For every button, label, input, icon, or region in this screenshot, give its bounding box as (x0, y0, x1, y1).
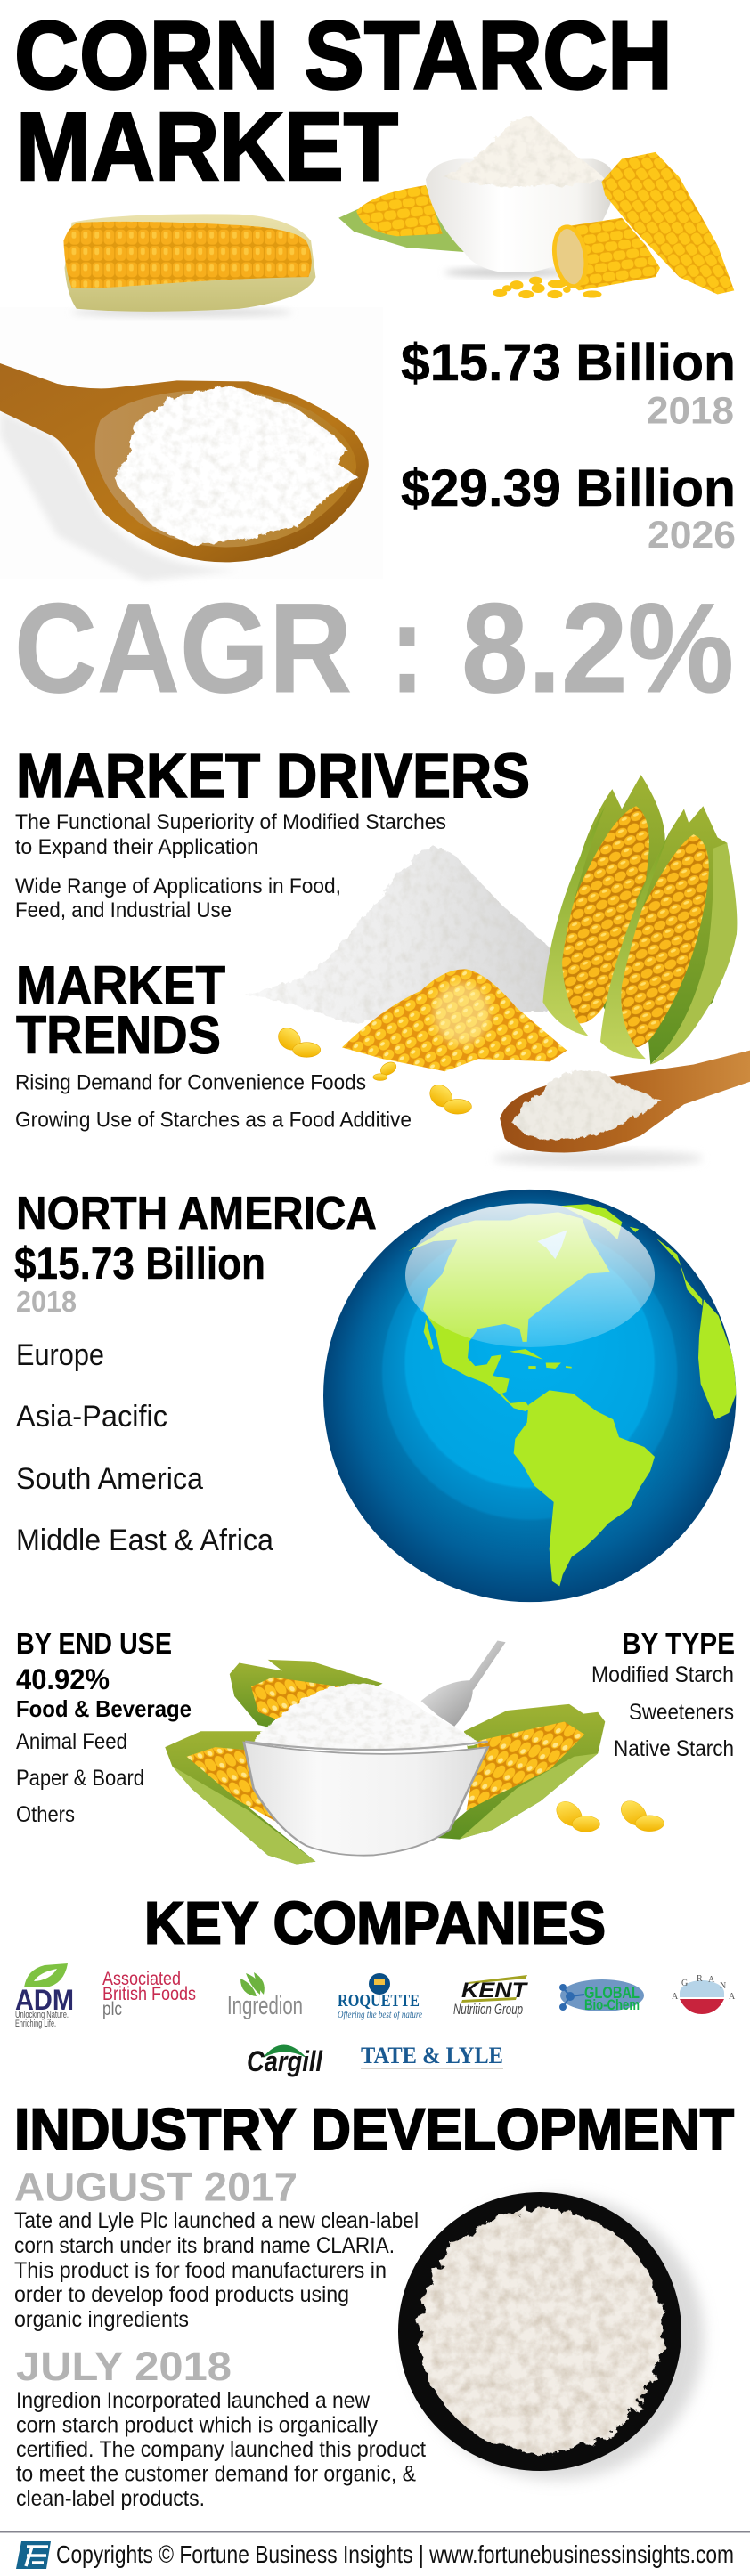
heading: key companies: KEY COMPANIES (144, 1889, 606, 1957)
icon: white starch pile (244, 847, 550, 1022)
illustration: starch pile, kernels, corn and spoon (244, 775, 750, 1166)
logo: ADM (15, 1963, 74, 2029)
logo: Global Bio-Chem: GLOBAL (584, 1984, 640, 2002)
logo: Kent: Nutrition Group (453, 2001, 523, 2018)
text: other regions list: Europe (16, 1338, 104, 1372)
logo: Roquette (338, 1973, 423, 2020)
logo: Kent: KENT (461, 1979, 529, 2003)
development: July 2018: clean-label products. (16, 2486, 205, 2511)
text: other regions list: Middle East & Africa (16, 1524, 273, 1557)
stat: 2018 market size: $15.73 Billion (401, 334, 736, 392)
icon: corn cob left (542, 775, 670, 1036)
text: market trends list: Growing Use of Starches as a Food Additive (15, 1108, 412, 1133)
logo: Agrana: G (681, 1979, 688, 1988)
logo: Roquette: ROQUETTE (338, 1991, 420, 2011)
logo: Global Bio-Chem: Bio-Chem (584, 1996, 640, 2013)
segment: by end use: BY END USE (16, 1627, 172, 1660)
icon: white bowl of starch with corn (338, 116, 734, 298)
icon: cut cob (550, 218, 660, 290)
icon: loose kernels (275, 1024, 471, 1114)
logo: Agrana (672, 1974, 736, 2014)
text: market drivers list: Wide Range of Applications in Food, (15, 874, 341, 898)
logo: ADM: ADM (15, 1984, 74, 2016)
text: market drivers list (15, 810, 446, 922)
text: other regions list (16, 1338, 273, 1557)
stat: 2026 market size (401, 459, 736, 557)
heading: North America figure: NORTH AMERICA (16, 1188, 377, 1239)
logo: Agrana: A (729, 1992, 736, 2002)
development: August 2017: organic ingredients (14, 2307, 189, 2332)
icon: whole cob (602, 152, 734, 294)
development: August 2017: corn starch under its brand name CLARIA. (14, 2233, 395, 2258)
photo background behind spoon (0, 307, 383, 579)
development: July 2018: corn starch product which is organically (16, 2413, 378, 2438)
icon: black plate of starch (398, 2192, 704, 2480)
logo: Global Bio-Chem (559, 1979, 644, 2013)
heading: market drivers: MARKET DRIVERS (16, 741, 530, 810)
development: July 2018: to meet the customer demand for organic, & (16, 2461, 416, 2486)
heading: market trends: MARKET (16, 955, 225, 1015)
text: market drivers list: The Functional Superiority of Modified Starches (15, 810, 446, 834)
text: market drivers list: to Expand their Application (15, 835, 258, 859)
logo: Associated British Foods: plc (102, 1999, 122, 2019)
icon: kernels (552, 1799, 664, 1832)
icon: wooden spoon with starch (493, 1051, 750, 1166)
icon: bowl (426, 158, 615, 272)
icon: globe (323, 1190, 737, 1602)
stat: CAGR: CAGR (14, 578, 352, 719)
heading: market trends: TRENDS (16, 1005, 221, 1065)
segment: by end use: Others (16, 1802, 75, 1827)
development: August 2017: Tate and Lyle Plc launched a new clean-label (14, 2208, 419, 2233)
icon: metal scoop (421, 1640, 506, 1727)
icon: corn upper left (230, 1660, 383, 1731)
icon: loose kernels (493, 277, 602, 298)
icon: corn behind bowl (338, 185, 464, 252)
text: market trends list: Rising Demand for Convenience Foods (15, 1070, 366, 1095)
text: market drivers list: Feed, and Industrial Use (15, 898, 232, 922)
stat: CAGR: : (390, 578, 424, 719)
heading: North America figure: $15.73 Billion (14, 1239, 265, 1288)
stat: CAGR: 8.2% (461, 578, 734, 719)
heading: North America figure (14, 1188, 377, 1318)
stat: CAGR (14, 578, 734, 719)
development: July 2018: certified. The company launched this product (16, 2437, 426, 2462)
text: market trends list (15, 1070, 412, 1133)
icon: corn right (436, 1704, 605, 1840)
title: MARKET (16, 93, 398, 201)
illustration: glass bowl of starch with corn (165, 1640, 664, 1864)
segment: by type: Sweeteners (629, 1700, 734, 1725)
logo: Agrana: A (672, 1992, 679, 2002)
segment: by end use: Food & Beverage (16, 1695, 192, 1722)
logo: Kent (453, 1975, 529, 2018)
icon: Fortune Business Insights logo (16, 2541, 51, 2569)
icon: wooden spoon with starch (0, 363, 369, 581)
development: July 2018: Ingredion Incorporated launched a new (16, 2388, 371, 2413)
icon: glass bowl (244, 1743, 488, 1856)
stat: 2018 market size (401, 334, 736, 433)
heading: market trends (16, 955, 225, 1065)
segment: by type (591, 1627, 735, 1761)
logo: Agrana: R (697, 1974, 703, 1984)
stat: 2026 market size: $29.39 Billion (401, 459, 736, 517)
segment: by type: Native Starch (614, 1736, 734, 1761)
icon: yellow kernel pile (342, 969, 567, 1071)
stat: 2018 market size: 2018 (647, 390, 734, 433)
icon: corn cob right (600, 806, 737, 1065)
development: July 2018: JULY 2018 (16, 2344, 232, 2389)
logo: Ingredion (227, 1972, 303, 2020)
icon: corn cob in husk (63, 214, 315, 317)
logo: Agrana: A (708, 1975, 715, 1985)
logo: Ingredion: Ingredion (227, 1992, 303, 2020)
icon: corn left (165, 1731, 315, 1864)
logo: Associated British Foods: Associated (102, 1969, 181, 1989)
logo: ADM: Unlocking Nature. (15, 2010, 69, 2020)
logo: ADM: Enriching Life. (15, 2019, 56, 2029)
icon: starch mound (443, 116, 605, 186)
development: August 2017: AUGUST 2017 (14, 2164, 298, 2210)
development: July 2018 (16, 2344, 426, 2511)
logo: Cargill: Cargill (247, 2045, 323, 2077)
segment: by end use: Animal Feed (16, 1729, 127, 1754)
segment: by end use: 40.92% (16, 1663, 110, 1695)
footer divider (0, 2531, 750, 2532)
logo: Tate and Lyle: TATE & LYLE (361, 2043, 503, 2068)
icon: starch mound (251, 1683, 481, 1751)
segment: by end use: Paper & Board (16, 1766, 144, 1791)
segment: by type: BY TYPE (622, 1627, 735, 1660)
development: August 2017: order to develop food products using (14, 2282, 349, 2307)
stat: 2026 market size: 2026 (648, 514, 736, 557)
heading: North America figure: 2018 (16, 1285, 77, 1318)
development: August 2017 (14, 2164, 419, 2332)
text: other regions list: Asia-Pacific (16, 1400, 167, 1434)
title (14, 2, 673, 201)
logo: Associated British Foods (102, 1969, 196, 2019)
logo: Associated British Foods: British Foods (102, 1984, 196, 2004)
segment: by end use (16, 1627, 192, 1827)
title: CORN STARCH (14, 2, 673, 110)
logo: Agrana: N (720, 1981, 726, 1991)
logo: Roquette: Offering the best of nature (338, 2008, 423, 2020)
text: other regions list: South America (16, 1462, 203, 1496)
development: August 2017: This product is for food manufacturers in (14, 2258, 387, 2283)
segment: by type: Modified Starch (591, 1662, 734, 1687)
